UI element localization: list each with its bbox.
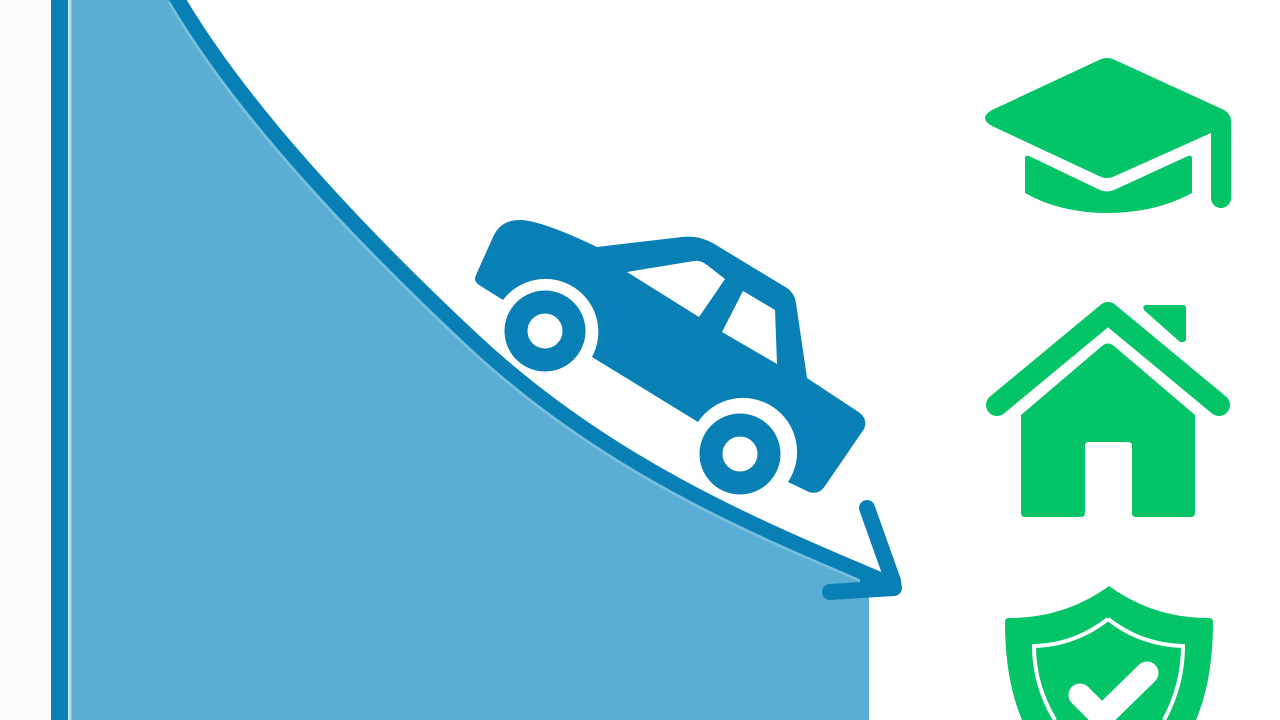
rear wheel <box>516 302 574 360</box>
front wheel <box>711 425 769 483</box>
icon: car going downhill <box>475 220 865 493</box>
chimney <box>1143 305 1186 342</box>
vertical axis <box>51 0 68 720</box>
icon: house <box>997 305 1219 517</box>
light edge of area <box>68 0 72 720</box>
icon: shield with check mark <box>1005 586 1213 720</box>
area under depreciation curve <box>70 0 893 720</box>
depreciation curve arrow <box>170 0 894 592</box>
icon: graduation cap <box>985 58 1231 213</box>
